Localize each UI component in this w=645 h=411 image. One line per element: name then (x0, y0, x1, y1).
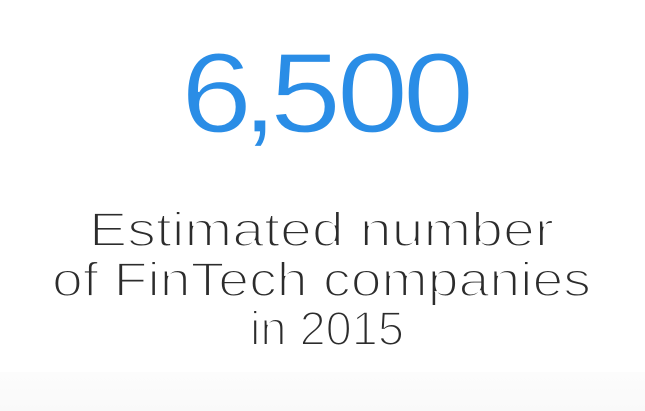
caption line 3: in 2015 (250, 303, 404, 356)
headline number: 6,500: 6,500 (181, 30, 474, 156)
caption: estimated number of FinTech companies in 2015 (52, 204, 591, 356)
caption line 2: of FinTech companies (52, 254, 591, 307)
bottom background band (0, 372, 645, 411)
caption line 1: Estimated number (89, 204, 554, 257)
